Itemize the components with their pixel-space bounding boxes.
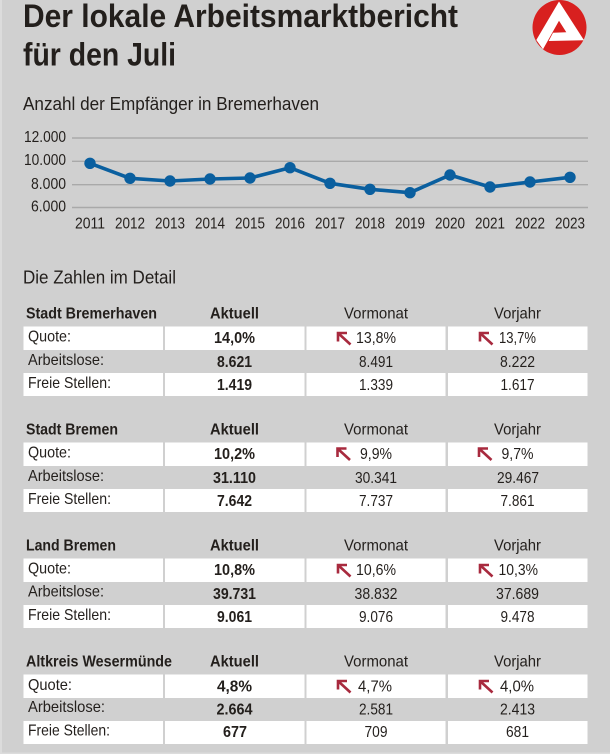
y axis labels [24,129,66,216]
values: 31.110 [213,470,256,487]
line chart [24,129,588,232]
x axis labels: 2021 [475,216,505,232]
values: 677 [223,724,247,741]
row labels [28,677,110,740]
x axis labels: 2023 [555,216,585,232]
icon: up arrows [338,448,492,460]
y axis labels: 12.000 [24,129,66,146]
values: 2.581 [359,702,393,718]
header row [26,306,542,322]
values: 9,7% [502,446,534,463]
values: 14,0% [214,330,255,347]
header row: Land Bremen [26,538,116,554]
subtitle: chart heading: Anzahl der Empfänger in Bremerhaven [23,93,319,114]
row labels: Quote: [28,560,71,578]
table rows background [24,442,588,512]
values: 4,8% [217,678,252,696]
values: 10,3% [498,562,538,579]
x axis labels: 2018 [355,216,385,232]
row labels: Freie Stellen: [28,607,111,624]
data line [90,163,570,193]
header row [26,654,542,670]
values: 13,8% [356,330,396,347]
header row: Vormonat [344,306,409,322]
values: 39.731 [213,586,256,603]
values: 7.642 [217,493,252,510]
values: 2.664 [216,702,253,718]
x axis labels: 2016 [275,216,305,232]
values: 7.737 [359,493,393,510]
values: 4,7% [358,678,392,696]
panel: Altkreis Wesermünde [24,654,588,744]
header row: Aktuell [210,306,259,322]
panel: Stadt Bremen [24,422,588,512]
header row: Vormonat [344,654,409,670]
header row [26,538,542,554]
row labels: Quote: [28,328,71,346]
row labels: Freie Stellen: [28,375,111,392]
x axis labels: 2017 [315,216,345,232]
values: 1.339 [359,377,393,394]
values: 9.061 [217,609,252,626]
icon: up arrows [338,565,492,576]
row labels: Freie Stellen: [28,723,110,740]
data points [84,158,576,198]
y axis labels: 6.000 [31,198,66,216]
values: 4,0% [500,678,534,696]
header row: Vormonat [344,422,409,438]
icon: up arrows [338,681,492,692]
values: 9,9% [360,446,392,463]
values: 7.861 [500,493,535,510]
table rows background [24,674,588,744]
x axis labels: 2012 [115,216,145,232]
values: 2.413 [500,702,535,718]
header row: Aktuell [210,422,259,438]
values: 681 [506,724,529,741]
values: 8.222 [500,354,535,371]
panel: Stadt Bremerhaven [24,306,588,396]
row labels: Quote: [28,444,71,462]
x axis labels [75,216,585,232]
panel: Land Bremen [24,538,588,628]
values: 13,7% [499,330,536,347]
header row: Aktuell [210,654,259,670]
header row [26,422,542,438]
header row: Altkreis Wesermünde [26,654,172,670]
values: 9.478 [500,609,535,626]
table rows background [24,326,588,396]
row labels [28,328,111,392]
values: 10,2% [214,446,255,463]
values [213,446,539,510]
values: 1.617 [500,377,535,394]
values: 37.689 [496,586,539,603]
x axis labels: 2011 [75,216,105,232]
row labels: Arbeitslose: [28,699,105,716]
header row: Vorjahr [494,422,542,438]
values: 8.621 [217,354,252,371]
values: 9.076 [359,609,393,626]
row labels [28,444,111,508]
table rows background [24,558,588,628]
section heading: Die Zahlen im Detail [23,266,176,288]
values: 709 [364,724,388,741]
values: 1.419 [217,377,252,394]
values [213,562,539,626]
y axis labels: 8.000 [31,176,66,193]
header row: Stadt Bremen [26,422,118,438]
row labels: Freie Stellen: [28,491,111,508]
x axis labels: 2014 [195,216,225,232]
row labels: Quote: [28,677,72,694]
values: 10,6% [356,562,396,579]
values [214,330,536,394]
y axis labels: 10.000 [24,152,66,169]
row labels: Arbeitslose: [28,584,104,600]
header row: Vormonat [344,538,409,554]
header row: Vorjahr [494,538,542,554]
row labels: Arbeitslose: [28,468,104,485]
icon: Bundesagentur logo [532,0,586,55]
x axis labels: 2019 [395,216,425,232]
values: 30.341 [355,470,397,487]
header row: Vorjahr [494,306,542,322]
header row: Vorjahr [494,654,542,670]
row labels [28,560,111,624]
values: 38.832 [354,586,398,603]
title: für den Juli [23,36,176,72]
values [216,678,535,741]
x axis labels: 2013 [155,216,185,232]
values: 10,8% [214,562,255,579]
x axis labels: 2020 [435,216,465,232]
values: 29.467 [497,470,539,487]
x axis labels: 2015 [235,216,265,232]
x axis labels: 2022 [515,216,545,232]
row labels: Arbeitslose: [28,352,104,369]
values: 8.491 [359,354,393,371]
icon: up arrows [338,333,492,344]
title [23,0,458,72]
header row: Aktuell [210,538,259,554]
header row: Stadt Bremerhaven [26,306,157,322]
